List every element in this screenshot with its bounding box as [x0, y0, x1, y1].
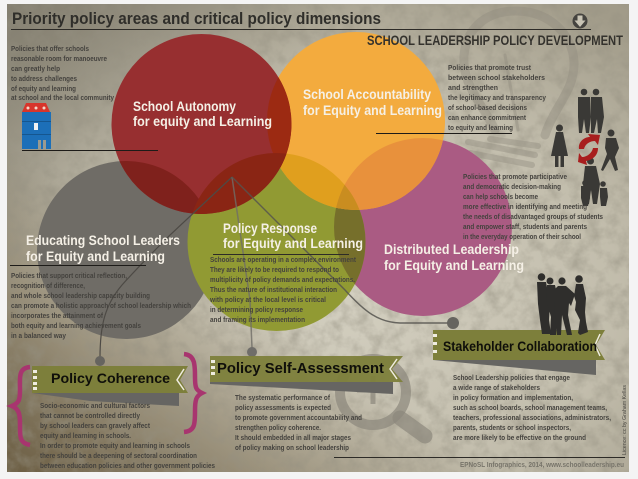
- banner: stakeholder collaboration: Stakeholder Collaboration: [443, 338, 597, 354]
- text: policy self-assessment: It should embedded in all major stages: [235, 435, 351, 442]
- circle: distributed leadership: [334, 138, 512, 316]
- rule: accountability: [376, 133, 512, 134]
- circle: educating school leaders: [37, 161, 215, 339]
- text: distributed leadership: the needs of disadvantaged groups of students: [463, 214, 603, 221]
- text: policy response: Schools are operating in a complex environment: [210, 257, 357, 264]
- text: policy self-assessment: [235, 395, 362, 452]
- text: stakeholder collaboration: [453, 375, 611, 442]
- text: stakeholder collaboration: parents, students or school inspectors,: [453, 425, 571, 432]
- text: policy response: with policy at the local level is critical: [209, 297, 326, 304]
- heading: school accountability: [303, 86, 442, 118]
- text: school accountability: Policies that promote trust: [448, 65, 532, 72]
- icon: school building: [22, 103, 51, 149]
- overlap: orange and green: [280, 154, 353, 210]
- text: distributed leadership: and empower staff, students and parents: [463, 224, 587, 231]
- text: policy response: Thus the nature of institutional interaction: [210, 287, 337, 294]
- text: policy self-assessment: strengthen policy coherence.: [235, 425, 321, 432]
- footer rule: [334, 457, 625, 458]
- text: educating school leaders: both equity and learning achievement goals: [11, 323, 141, 330]
- text: stakeholder collaboration: in policy formation and implementation,: [453, 395, 573, 402]
- heading: school autonomy: School Autonomy: [133, 98, 236, 114]
- text: stakeholder collaboration: a wide range of stakeholders: [453, 385, 540, 392]
- node: policy self-assessment: [247, 347, 257, 357]
- node: policy coherence: [95, 356, 105, 366]
- text: policy self-assessment: of policy making on school leadership: [235, 445, 349, 452]
- text: distributed leadership: in the everyday operation of their school: [463, 234, 581, 241]
- text: policy response: in determining policy response: [210, 307, 303, 314]
- heading: school autonomy: for equity and Learning: [133, 113, 272, 129]
- overlap: red and orange: [267, 78, 292, 167]
- icon: lightbulb watermark: [464, 11, 574, 165]
- text: policy coherence: that cannot be controlled directly: [40, 413, 140, 420]
- text: policy coherence: by school leaders can gravely affect: [40, 423, 151, 430]
- icon: stakeholder group silhouettes: [537, 273, 588, 335]
- banner: policy coherence: Policy Coherence: [51, 370, 170, 386]
- text: educating school leaders: and whole school leadership capacity building: [11, 293, 150, 300]
- text: educating school leaders: in a balanced way: [11, 333, 66, 340]
- text: policy coherence: there should be a deepening of sectoral coordination: [40, 453, 197, 460]
- text: educating school leaders: incorporates the attainment of: [11, 313, 104, 320]
- text: school autonomy: reasonable room for manoeuvre: [11, 56, 107, 63]
- heading: school autonomy: [133, 98, 272, 129]
- connector: stakeholder collaboration: [232, 177, 450, 323]
- banner: policy coherence: [32, 366, 188, 406]
- heading: educating school leaders: [26, 232, 180, 264]
- heading: school accountability: for Equity and Learning: [303, 102, 442, 118]
- text: policy coherence: Socio-economic and cultural factors: [40, 403, 150, 410]
- heading: distributed leadership: for Equity and Learning: [384, 257, 524, 273]
- text: policy self-assessment: policy assessments is expected: [235, 405, 331, 412]
- heading: educating school leaders: for Equity and Learning: [26, 248, 165, 264]
- text: policy coherence: equity and learning in schools.: [40, 433, 131, 440]
- connector: policy coherence: [100, 177, 232, 358]
- text: school autonomy: Policies that offer schools: [11, 46, 89, 53]
- text: school accountability: and strengthen: [448, 85, 498, 92]
- text: school autonomy: to address challenges: [11, 76, 77, 83]
- text: school accountability: can enhance commitment: [448, 115, 527, 122]
- text: educating school leaders: can promote a holistic approach of school leadership which: [11, 303, 191, 310]
- banner: stakeholder collaboration: [433, 330, 605, 375]
- heading: educating school leaders: Educating School Leaders: [26, 232, 180, 248]
- icon: down arrow: [572, 14, 588, 28]
- heading: distributed leadership: Distributed Leadership: [384, 241, 519, 257]
- text: stakeholder collaboration: teachers, professional associations, administrators,: [453, 415, 611, 422]
- heading: distributed leadership: [384, 241, 524, 273]
- text: distributed leadership: Policies that promote participative: [463, 174, 567, 181]
- image credit: Licence: cc by Graham Kellas: [622, 385, 628, 455]
- circle: school autonomy: [112, 34, 292, 214]
- text: school autonomy: of equity and learning: [11, 86, 76, 93]
- text: stakeholder collaboration: School Leadership policies that engage: [453, 375, 570, 382]
- title rule: [11, 29, 591, 30]
- heading: school accountability: School Accountability: [303, 86, 431, 102]
- text: school accountability: [448, 65, 546, 132]
- circle: school accountability: [267, 32, 445, 210]
- text: policy response: [209, 257, 357, 324]
- text: policy response: and framing its implementation: [210, 317, 305, 324]
- text: school accountability: the legitimacy and transparency: [448, 95, 546, 102]
- text: educating school leaders: Policies that support critical reflection,: [11, 273, 127, 280]
- rule: policy response: [213, 254, 349, 255]
- text: school autonomy: can greatly help: [11, 66, 60, 73]
- text: school autonomy: [11, 46, 114, 102]
- heading: policy response: Policy Response: [223, 220, 317, 236]
- text: policy response: multiplicity of policy demands and expectations.: [210, 277, 355, 284]
- text: policy self-assessment: The systematic performance of: [235, 395, 331, 402]
- connector: policy self-assessment: [232, 177, 252, 348]
- text: policy coherence: between education policies and other government policies: [40, 463, 215, 470]
- text: school accountability: between school stakeholders: [448, 75, 545, 82]
- icon: magnifying glass: [340, 359, 425, 436]
- heading: policy response: for Equity and Learning: [223, 235, 363, 251]
- overlap: red and gray: [120, 161, 208, 214]
- text: distributed leadership: can help schools become: [463, 194, 538, 201]
- text: stakeholder collaboration: such as school boards, school management teams,: [453, 405, 607, 412]
- text: policy coherence: In order to promote equity and learning in schools: [40, 443, 190, 450]
- text: distributed leadership: [463, 174, 603, 241]
- text: school autonomy: at school and the local community: [11, 95, 114, 102]
- banner: policy self-assessment: [210, 356, 403, 394]
- text: distributed leadership: and democratic decision-making: [463, 184, 561, 191]
- text: stakeholder collaboration: are more likely to be effective on the ground: [453, 435, 586, 442]
- overlap: orange and purple: [336, 138, 443, 210]
- text: distributed leadership: more effective in identifying and meeting: [463, 204, 587, 211]
- node: stakeholder collaboration: [447, 317, 459, 329]
- text: policy self-assessment: to promote government accountability and: [235, 415, 362, 422]
- heading: policy response: [223, 220, 363, 251]
- text: policy coherence: [40, 403, 215, 470]
- text: educating school leaders: [11, 273, 191, 340]
- text: school accountability: to equity and learning: [448, 125, 513, 132]
- banner: policy self-assessment: Policy Self-Assessment: [217, 360, 384, 377]
- right brace: [184, 354, 202, 432]
- text: educating school leaders: recognition of difference,: [11, 283, 85, 290]
- text: school accountability: of school-based decisions: [448, 105, 527, 112]
- overlap: green and purple: [334, 208, 366, 284]
- left brace: [12, 367, 30, 445]
- overlap: red and green: [193, 153, 286, 214]
- circle: policy response: [188, 153, 366, 331]
- icon: community silhouettes: [551, 89, 619, 206]
- footer credit: EPNoSL Infographics, 2014, www.schoolleadership.eu: [460, 462, 624, 469]
- icon: red cycle arrows: [578, 134, 600, 165]
- title: Priority policy areas and critical policy dimensions: [12, 9, 381, 28]
- text: policy response: They are likely to be required to respond to: [210, 267, 339, 274]
- rule: autonomy: [22, 150, 158, 151]
- overlap: orange green purple: [336, 185, 360, 210]
- rule: educating: [10, 265, 146, 266]
